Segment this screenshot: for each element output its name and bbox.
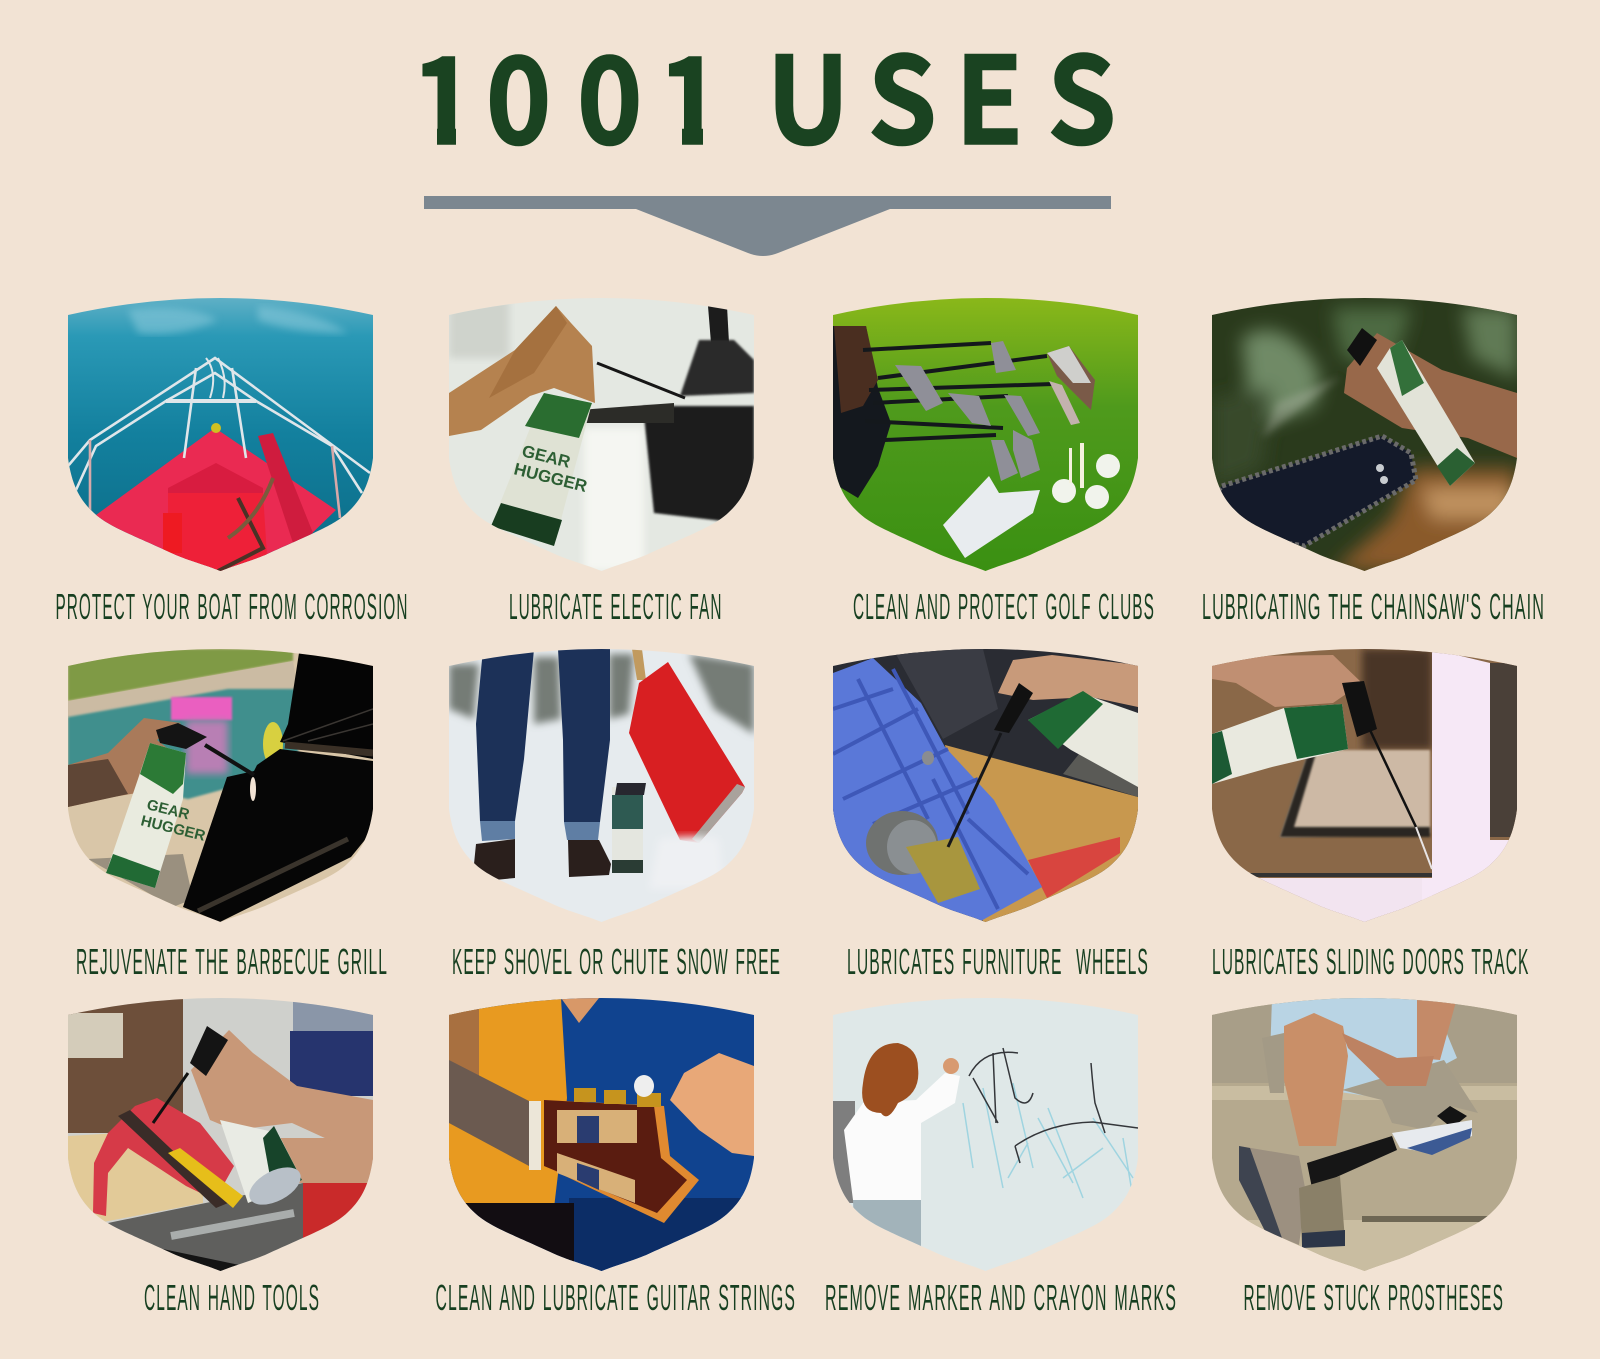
panel: electric fan [449,298,754,571]
panel: guitar [449,998,754,1271]
panel: prostheses [1212,998,1517,1271]
title: 1001 USES [411,5,1116,179]
text: REJUVENATE THE BARBECUE GRILL [76,941,388,982]
text: REMOVE MARKER AND CRAYON MARKS [825,1277,1177,1318]
panel: electric fan: HUGGER [512,459,589,496]
arrow divider [424,196,1111,256]
panel: sliding doors [1212,649,1517,922]
panel: furniture wheels [833,649,1138,922]
panel: crayon marks [833,998,1138,1271]
text: KEEP SHOVEL OR CHUTE SNOW FREE [452,941,781,982]
text: LUBRICATE ELECTIC FAN [509,586,722,627]
panel: snow shovel [449,649,754,922]
panel: barbecue grill: HUGGER [139,812,207,845]
text: LUBRICATES FURNITURE WHEELS [847,941,1149,982]
text: CLEAN AND LUBRICATE GUITAR STRINGS [436,1277,796,1318]
text: PROTECT YOUR BOAT FROM CORROSION [56,586,408,627]
text: CLEAN AND PROTECT GOLF CLUBS [853,586,1155,627]
panel: hand tools [68,998,373,1271]
panel: chainsaw [1212,298,1517,571]
panel: barbecue grill [68,649,373,922]
panel: golf clubs [833,298,1138,571]
panel: barbecue grill: GEAR [145,796,191,823]
text: CLEAN HAND TOOLS [144,1277,320,1318]
panel: electric fan: GEAR [520,441,572,472]
panel: boat [68,298,373,571]
